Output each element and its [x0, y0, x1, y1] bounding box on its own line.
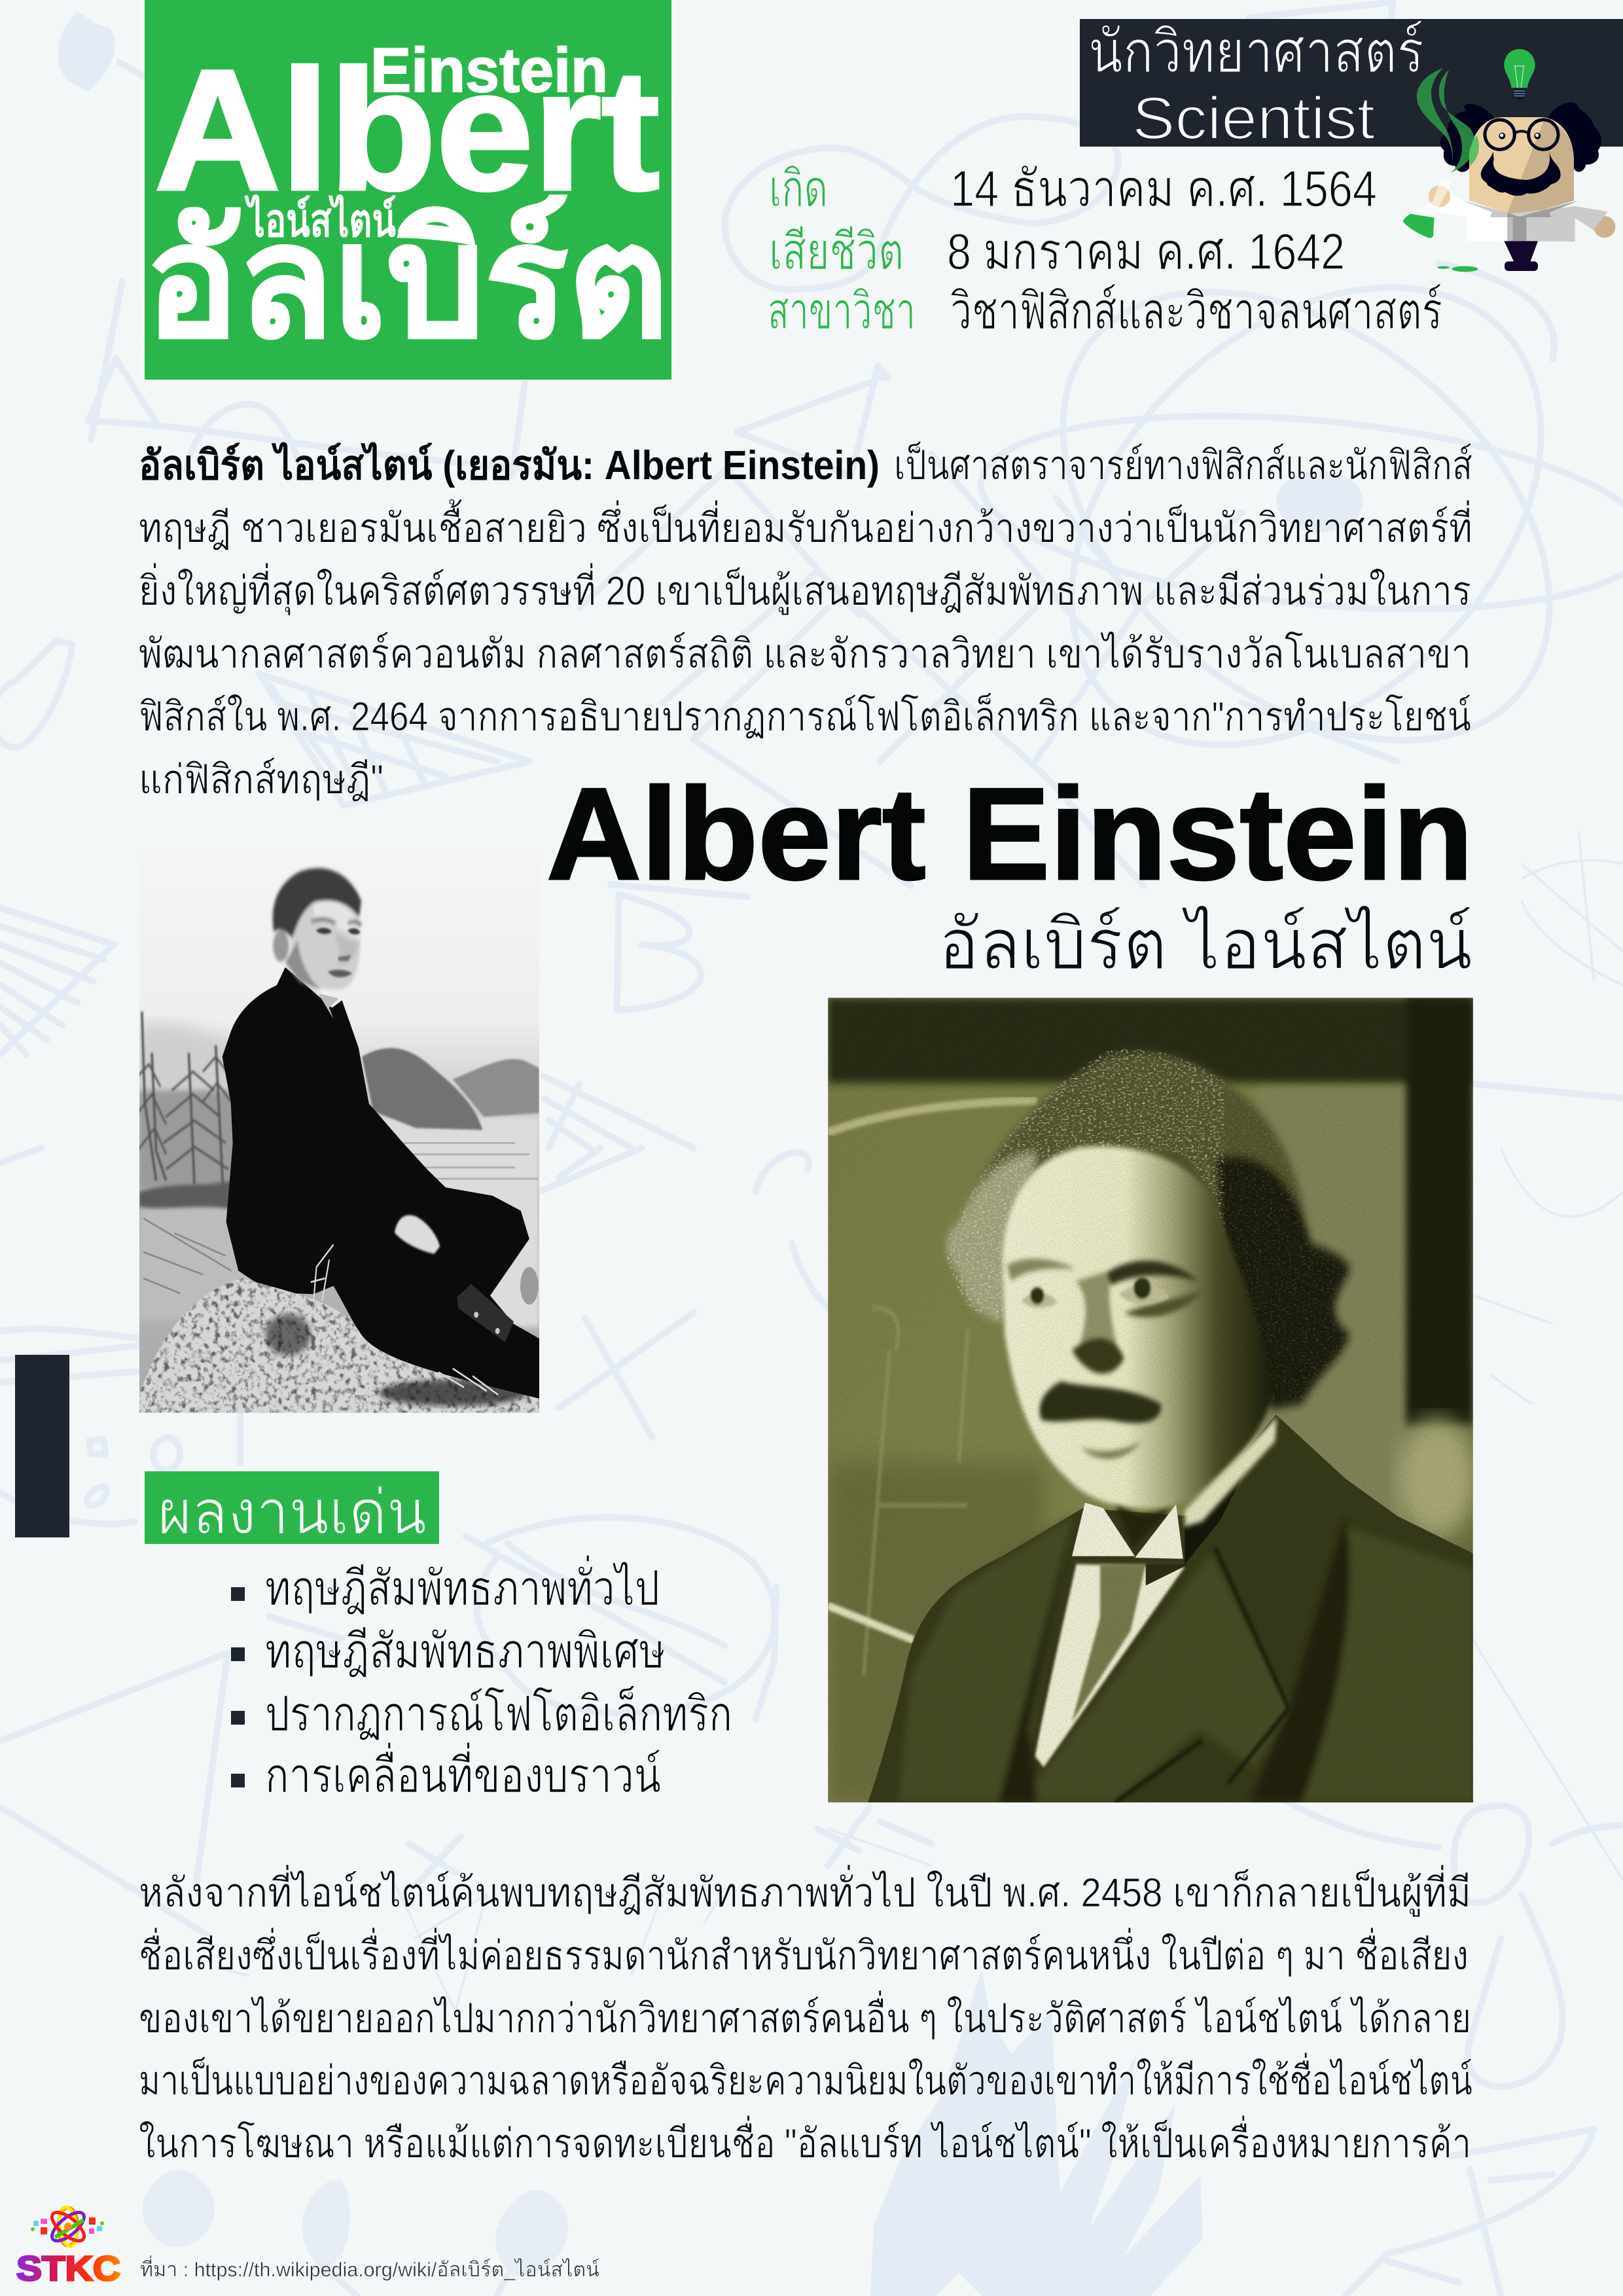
list item 3: ปรากฏการณ์โฟโตอิเล็กทริก [265, 1686, 732, 1741]
list: notable works [231, 1554, 732, 1803]
title: Thai surname: ไอน์สไตน์ [244, 194, 397, 246]
info row: death label: เสียชีวิต [769, 223, 904, 280]
heading: notable works: ผลงานเด่น [158, 1478, 427, 1547]
title: Einstein: Einstein [370, 35, 608, 105]
banner Thai label: นักวิทยาศาสตร์ [1088, 20, 1424, 85]
banner: scientist label [1080, 19, 1623, 152]
text block: fame paragraph: หลังจากที่ไอน์ชไตน์ค้นพบทฤษฎีสัมพัทธภาพทั่วไป ในปี พ.ศ. 2458 เขาก็กลายเป็นผู้ที่มี [139, 1865, 1471, 1917]
icon: STKC atom logo [31, 2206, 104, 2248]
info row: death date: 8 มกราคม ค.ศ. 1642 [947, 223, 1345, 280]
list item 2: ทฤษฎีสัมพัทธภาพพิเศษ [265, 1624, 666, 1678]
text block: fame paragraph [139, 1865, 1472, 2166]
background doodle: flames [870, 1969, 1203, 2296]
banner English label: Scientist [1132, 85, 1375, 152]
heading: Albert Einstein: Albert Einstein [546, 761, 1473, 907]
decorative dark bar [15, 1355, 69, 1537]
info row: birth date: 14 ธันวาคม ค.ศ. 1564 [950, 160, 1377, 217]
text block: biography intro: อัลเบิร์ต ไอน์สไตน์ (เยอรมัน: Albert Einstein) [139, 442, 880, 488]
text block: biography intro: เป็นศาสตราจารย์ทางฟิสิกส์และนักฟิสิกส์ [894, 441, 1472, 488]
list item 1: ทฤษฎีสัมพัทธภาพทั่วไป [265, 1554, 660, 1615]
title block: Albert Einstein green panel [145, 0, 671, 380]
text block: biography intro: แก่ฟิสิกส์ทฤษฎี" [139, 757, 383, 802]
background doodles: lower half [0, 1148, 1623, 2296]
logo wordmark: STKC: STKC [16, 2250, 120, 2288]
text block: biography intro: พัฒนากลศาสตร์ควอนตัม กลศาสตร์สถิติ และจักรวาลวิทยา เขาได้รับรางวัลโนเบลสาขา [139, 631, 1471, 677]
source citation: ที่มา : https://th.wikipedia.org/wiki/อัลเบิร์ต_ไอน์สไตน์ [140, 2255, 599, 2281]
background doodles: upper half [0, 2, 1623, 1148]
text block: biography intro [139, 441, 1472, 802]
info row: birth label: เกิด [769, 160, 828, 217]
info row: field label: สาขาวิชา [768, 282, 916, 340]
photo: portrait of Albert Einstein [828, 997, 1476, 1804]
info row: field value: วิชาฟิสิกส์และวิชาจลนศาสตร์ [950, 282, 1442, 340]
list item 4 [231, 1742, 661, 1803]
text block: biography intro: ยิ่งใหญ่ที่สุดในคริสต์ศตวรรษที่ 20 เขาเป็นผู้เสนอทฤษฎีสัมพัทธภาพ และมีส่วนร่วมในการ [139, 563, 1471, 615]
heading: Thai name: อัลเบิร์ต ไอน์สไตน์ [938, 905, 1472, 984]
icon: scientist character with flask and light bulb [1403, 49, 1615, 272]
text block: biography intro: ทฤษฎี ชาวเยอรมันเชื้อสายยิว ซึ่งเป็นที่ยอมรับกันอย่างกว้างขวางว่าเป็นนักวิทยาศาสตร์ที่ [139, 499, 1472, 551]
photo: young Einstein seated on rock [135, 851, 539, 1413]
title: Thai first name: อัลเบิร์ต [145, 194, 669, 369]
title: Albert: Albert [154, 34, 660, 226]
list item 4: การเคลื่อนที่ของบราวน์ [265, 1742, 661, 1803]
list item 1 [231, 1554, 660, 1615]
